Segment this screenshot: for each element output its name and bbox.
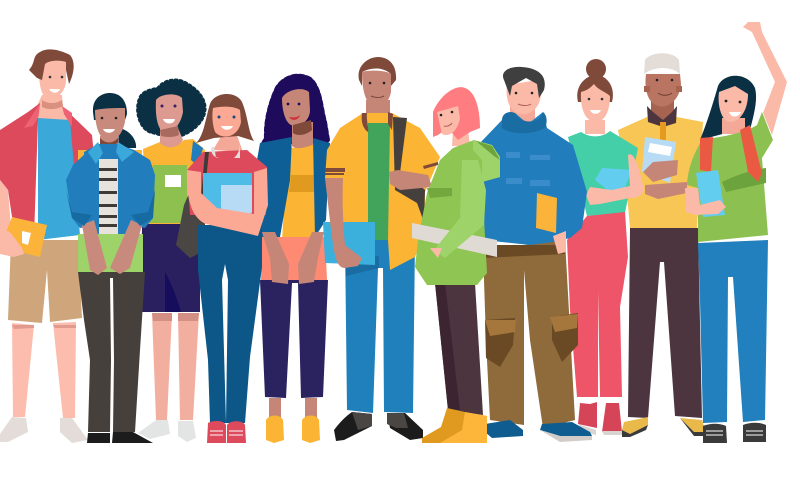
student: boy in blue puffer jacket with cargo pants [480, 67, 592, 442]
student: man in cap and yellow polo [618, 53, 706, 437]
student: man in yellow jacket with backpack [323, 57, 440, 441]
student: girl with curly hair and blue vest [257, 77, 330, 443]
student: girl in red top with headphones and bag [176, 94, 268, 443]
arms: crossed [187, 168, 268, 236]
student: girl in blue jacket and striped shirt [66, 93, 155, 443]
book: yellow [0, 217, 47, 257]
student: girl in green tee waving [685, 22, 787, 443]
student: girl with hair bun and teal top [567, 59, 644, 435]
student: girl with afro hair and yellow top [138, 80, 205, 442]
student: girl with pink hair and green hoodie [412, 87, 500, 443]
arm: raised waving [743, 22, 787, 135]
student: tall man in red shirt and shorts [0, 49, 95, 443]
